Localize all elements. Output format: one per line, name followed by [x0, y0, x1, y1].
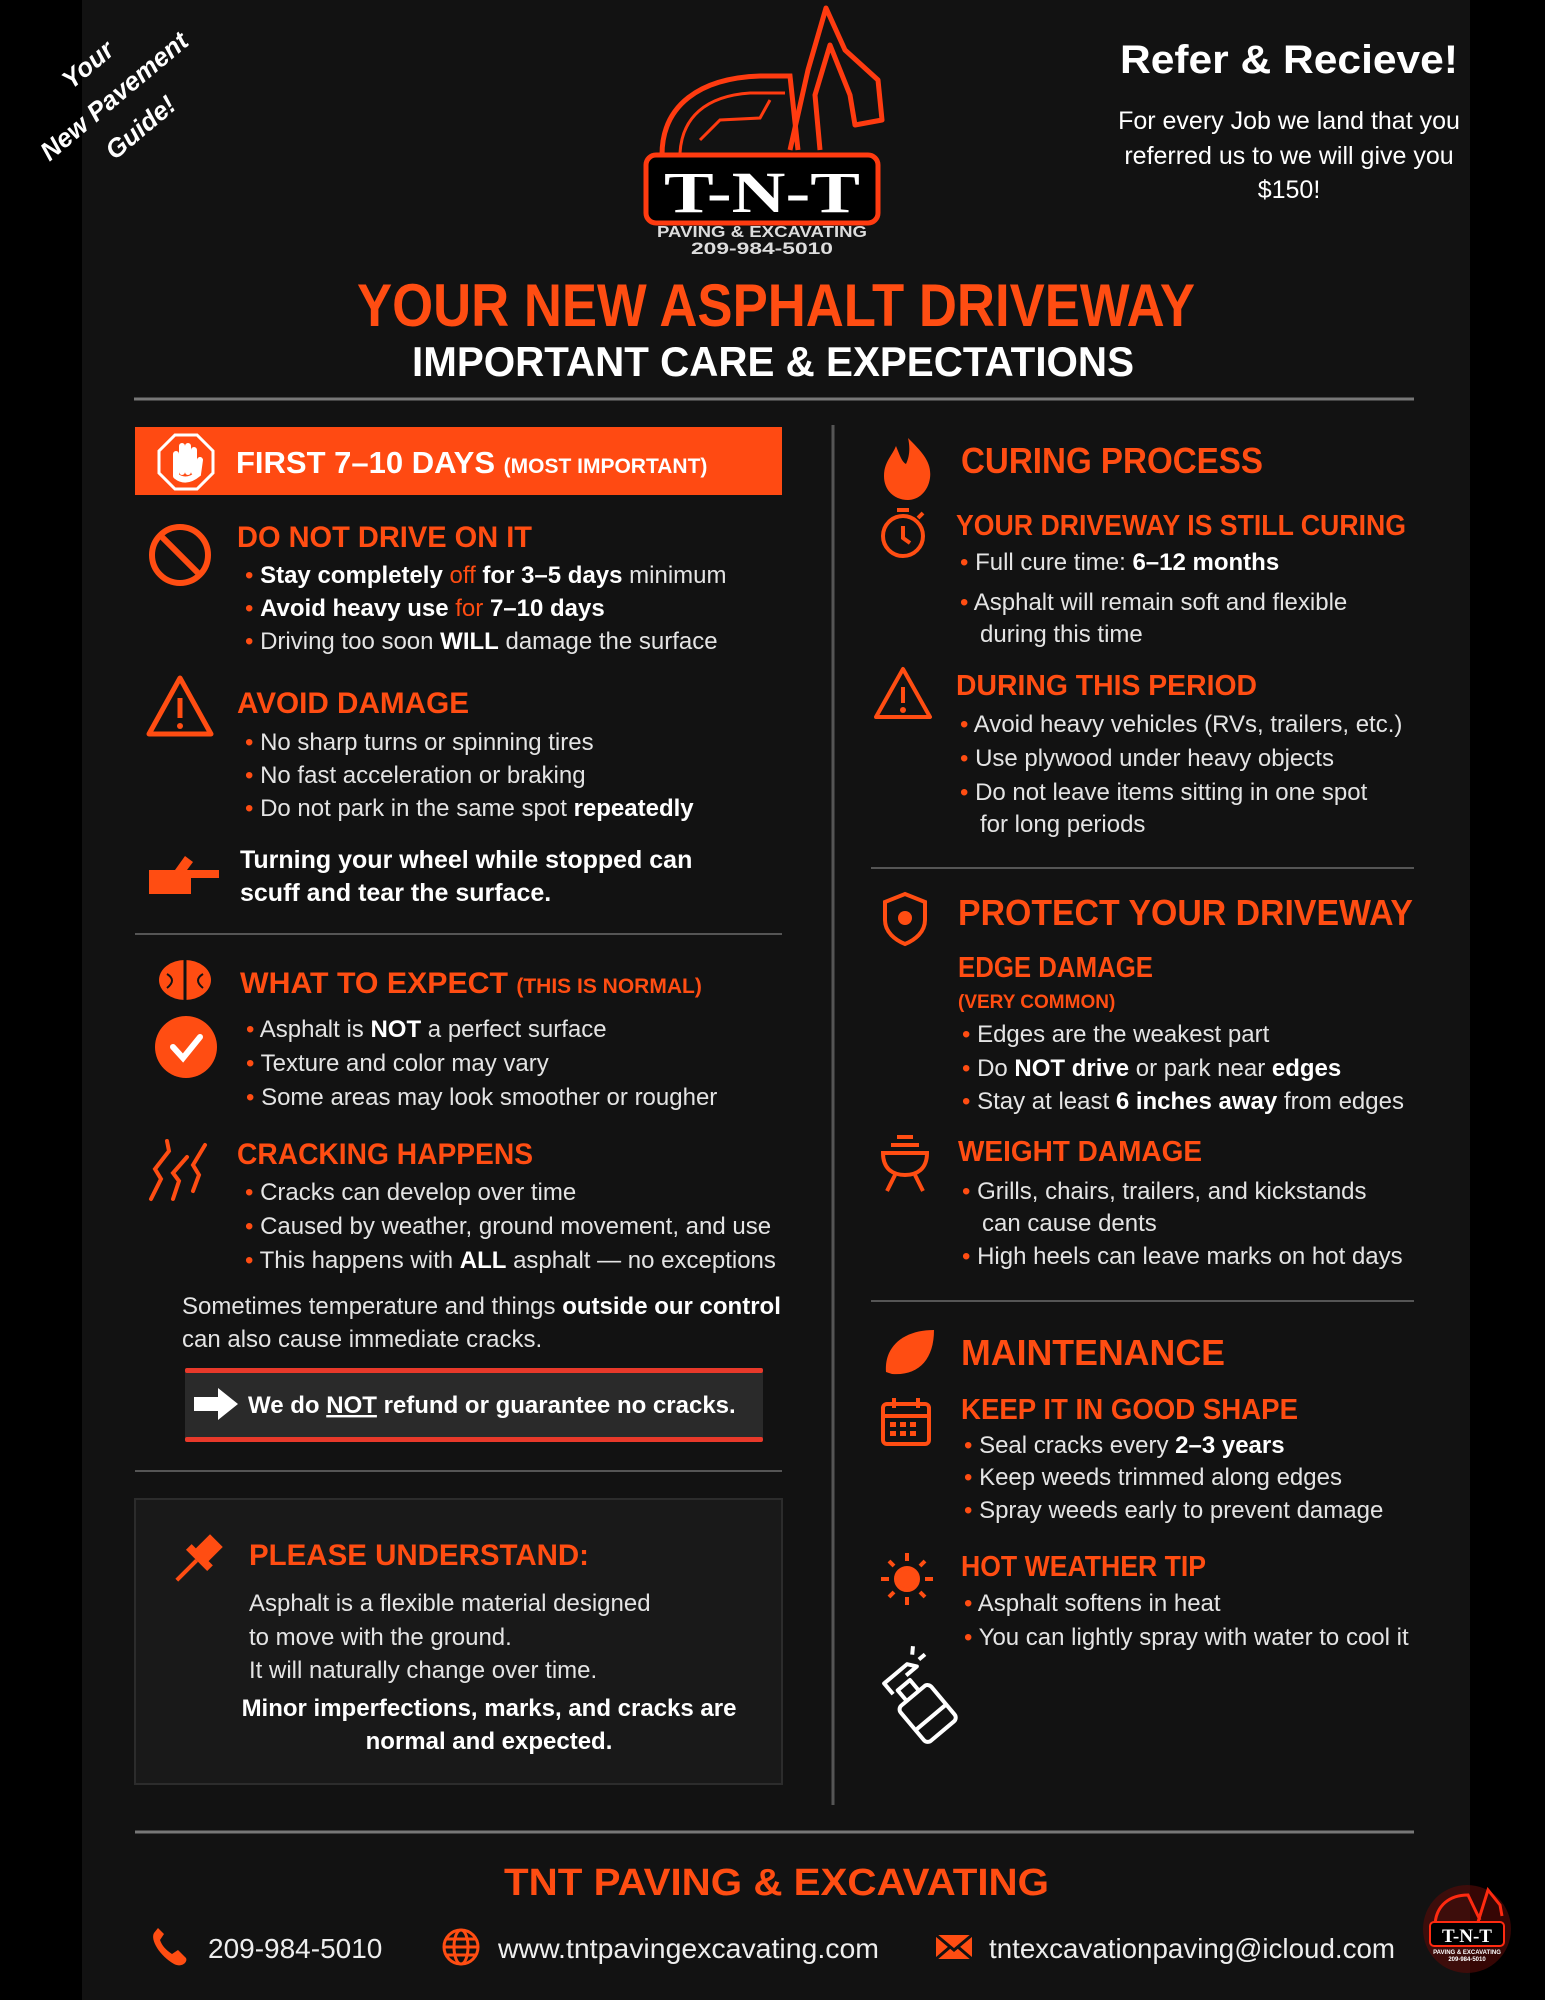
icon: pointing hand: [149, 856, 219, 894]
callout: no refund: We do NOT refund or guarantee no cracks.: [248, 1392, 736, 1419]
section: what to expect: WHAT TO EXPECT (THIS IS NORMAL): [240, 967, 702, 1000]
icon: globe: [444, 1930, 478, 1964]
icon: flame: [884, 438, 930, 500]
title: YOUR NEW ASPHALT DRIVEWAY: [357, 272, 1195, 339]
section: protect your driveway: • Stay at least 6 inches away from edges: [962, 1088, 1404, 1115]
panel: please understand: [135, 1499, 782, 1784]
referral callout: Refer & Recieve!: [1120, 38, 1458, 82]
section: during this period: DURING THIS PERIOD: [956, 670, 1257, 702]
section: protect your driveway: (VERY COMMON): [958, 992, 1115, 1013]
section: during this period: • Avoid heavy vehicles (RVs, trailers, etc.): [960, 711, 1402, 738]
section: do not drive on it: • Stay completely off for 3–5 days minimum: [245, 562, 727, 589]
referral callout: referred us to we will give you: [1124, 142, 1454, 170]
logo: T-N-T paving & excavating: [646, 8, 882, 258]
icon: shield: [885, 894, 925, 944]
section: do not drive on it: • Driving too soon WILL damage the surface: [245, 628, 718, 655]
section: protect your driveway: PROTECT YOUR DRIVEWAY: [958, 892, 1413, 933]
section: do not drive on it: DO NOT DRIVE ON IT: [237, 521, 532, 554]
icon: warning triangle: [149, 678, 211, 734]
section: cracking happens: • Cracks can develop over time: [245, 1179, 576, 1206]
section: keep it in good shape: KEEP IT IN GOOD SHAPE: [961, 1394, 1298, 1426]
panel: please understand: to move with the ground.: [249, 1624, 512, 1651]
corner tag: your new pavement guide: New Pavement: [34, 25, 195, 166]
section: hot weather tip: [881, 1551, 1409, 1651]
section: curing process: CURING PROCESS: [961, 440, 1263, 481]
section: avoid damage: AVOID DAMAGE: [237, 687, 469, 720]
icon: push pin: [166, 1530, 227, 1591]
section: during this period: for long periods: [980, 811, 1145, 838]
section: do not drive on it: [152, 521, 727, 655]
section: protect your driveway: [885, 892, 1413, 1115]
section: protect your driveway: EDGE DAMAGE: [958, 952, 1153, 984]
panel: please understand: It will naturally change over time.: [249, 1657, 597, 1684]
section: weight damage: [883, 1136, 1403, 1270]
title: IMPORTANT CARE & EXPECTATIONS: [412, 338, 1134, 385]
section: maintenance: MAINTENANCE: [961, 1332, 1225, 1373]
logo: T-N-T paving & excavating: 209-984-5010: [691, 239, 833, 258]
panel: please understand: Asphalt is a flexible material designed: [249, 1590, 651, 1617]
panel: please understand: normal and expected.: [366, 1728, 612, 1755]
icon: stop hand: [159, 435, 213, 489]
section: still curing: • Full cure time: 6–12 months: [960, 549, 1279, 576]
icon: cracks: [151, 1141, 205, 1199]
tip: turning wheel: Turning your wheel while stopped can: [240, 846, 692, 874]
icon: grill: [883, 1137, 927, 1191]
logo: T-N-T paving & excavating: PAVING & EXCAVATING: [657, 224, 867, 241]
section: avoid damage: • No fast acceleration or braking: [245, 762, 586, 789]
icon: spray bottle: [873, 1644, 970, 1744]
section: weight damage: can cause dents: [982, 1210, 1157, 1237]
section: during this period: • Use plywood under heavy objects: [960, 745, 1334, 772]
panel: first 7-10 days banner: [135, 427, 782, 495]
icon: leaf: [886, 1330, 934, 1374]
logo: T-N-T paving & excavating: T-N-T: [664, 160, 860, 225]
panel: first 7-10 days banner: FIRST 7–10 DAYS (MOST IMPORTANT): [236, 445, 707, 480]
footer: contacts: www.tntpavingexcavating.com: [497, 1933, 879, 1964]
callout: no refund: [185, 1368, 763, 1442]
section: what to expect: • Asphalt is NOT a perfect surface: [246, 1016, 607, 1043]
section: avoid damage: • Do not park in the same spot repeatedly: [245, 795, 694, 822]
section: curing process: [884, 438, 1263, 500]
icon: check circle: [155, 1016, 217, 1078]
icon: phone: [153, 1928, 186, 1965]
icon: calendar: [883, 1398, 929, 1444]
section: hot weather tip: HOT WEATHER TIP: [961, 1551, 1206, 1583]
section: what to expect: • Texture and color may vary: [246, 1050, 549, 1077]
section: protect your driveway: • Edges are the weakest part: [962, 1021, 1270, 1048]
panel: please understand: Minor imperfections, marks, and cracks are: [242, 1695, 736, 1722]
title: [357, 272, 1195, 385]
section: weight damage: WEIGHT DAMAGE: [958, 1136, 1202, 1168]
icon: brain: [159, 960, 211, 1000]
section: avoid damage: [149, 678, 694, 822]
section: hot weather tip: • Asphalt softens in heat: [964, 1590, 1221, 1617]
section: cracking happens: • Caused by weather, ground movement, and use: [245, 1213, 771, 1240]
section: hot weather tip: • You can lightly spray with water to cool it: [964, 1624, 1409, 1651]
section: during this period: • Do not leave items sitting in one spot: [960, 779, 1368, 806]
tip: turning wheel: [149, 846, 692, 907]
section: keep it in good shape: • Keep weeds trimmed along edges: [964, 1464, 1342, 1491]
small logo bottom right: T-N-T: [1442, 1926, 1492, 1947]
footer: contacts: tntexcavationpaving@icloud.com: [989, 1933, 1395, 1964]
section: during this period: [876, 669, 1402, 838]
text block: sometimes temperature: Sometimes temperature and things outside our control: [182, 1293, 781, 1320]
section: what to expect: [155, 960, 717, 1111]
tip: turning wheel: scuff and tear the surface.: [240, 879, 551, 907]
small logo bottom right: [1423, 1885, 1511, 1973]
section: still curing: • Asphalt will remain soft and flexible: [960, 589, 1347, 616]
referral callout: For every Job we land that you: [1118, 107, 1460, 135]
section: do not drive on it: • Avoid heavy use for 7–10 days: [245, 595, 605, 622]
icon: sun: [881, 1553, 933, 1605]
footer: contacts: [153, 1928, 1395, 1965]
section: keep it in good shape: • Spray weeds early to prevent damage: [964, 1497, 1383, 1524]
section: weight damage: • High heels can leave marks on hot days: [962, 1243, 1403, 1270]
small logo bottom right: PAVING & EXCAVATING: [1433, 1950, 1501, 1956]
section: cracking happens: CRACKING HAPPENS: [237, 1138, 533, 1171]
icon: no symbol: [152, 527, 208, 583]
corner tag: your new pavement guide: [8, 0, 221, 198]
corner tag: your new pavement guide: Guide!: [99, 89, 182, 165]
icon: envelope: [936, 1935, 972, 1959]
panel: please understand: PLEASE UNDERSTAND:: [249, 1539, 589, 1572]
section: cracking happens: • This happens with ALL asphalt — no exceptions: [245, 1247, 776, 1274]
section: still curing: [883, 510, 1406, 648]
footer: contacts: 209-984-5010: [208, 1933, 382, 1964]
section: still curing: during this time: [980, 621, 1143, 648]
section: cracking happens: [151, 1138, 776, 1274]
section: avoid damage: • No sharp turns or spinning tires: [245, 729, 594, 756]
small logo bottom right: 209-984-5010: [1448, 1957, 1486, 1963]
text block: sometimes temperature: [182, 1293, 781, 1353]
icon: stopwatch: [883, 510, 923, 556]
section: still curing: YOUR DRIVEWAY IS STILL CURING: [956, 510, 1406, 542]
referral callout: $150!: [1258, 176, 1320, 204]
icon: arrow: [194, 1388, 238, 1420]
icon: warning triangle: [876, 669, 930, 717]
section: keep it in good shape: • Seal cracks every 2–3 years: [964, 1432, 1285, 1459]
text block: sometimes temperature: can also cause immediate cracks.: [182, 1326, 542, 1353]
referral callout: [1118, 38, 1460, 204]
section: protect your driveway: • Do NOT drive or park near edges: [962, 1055, 1341, 1082]
footer: company name: TNT PAVING & EXCAVATING: [504, 1862, 1049, 1904]
corner tag: your new pavement guide: Your: [56, 33, 121, 95]
section: what to expect: • Some areas may look smoother or rougher: [246, 1084, 717, 1111]
section: weight damage: • Grills, chairs, trailers, and kickstands: [962, 1178, 1367, 1205]
section: keep it in good shape: [883, 1394, 1383, 1524]
